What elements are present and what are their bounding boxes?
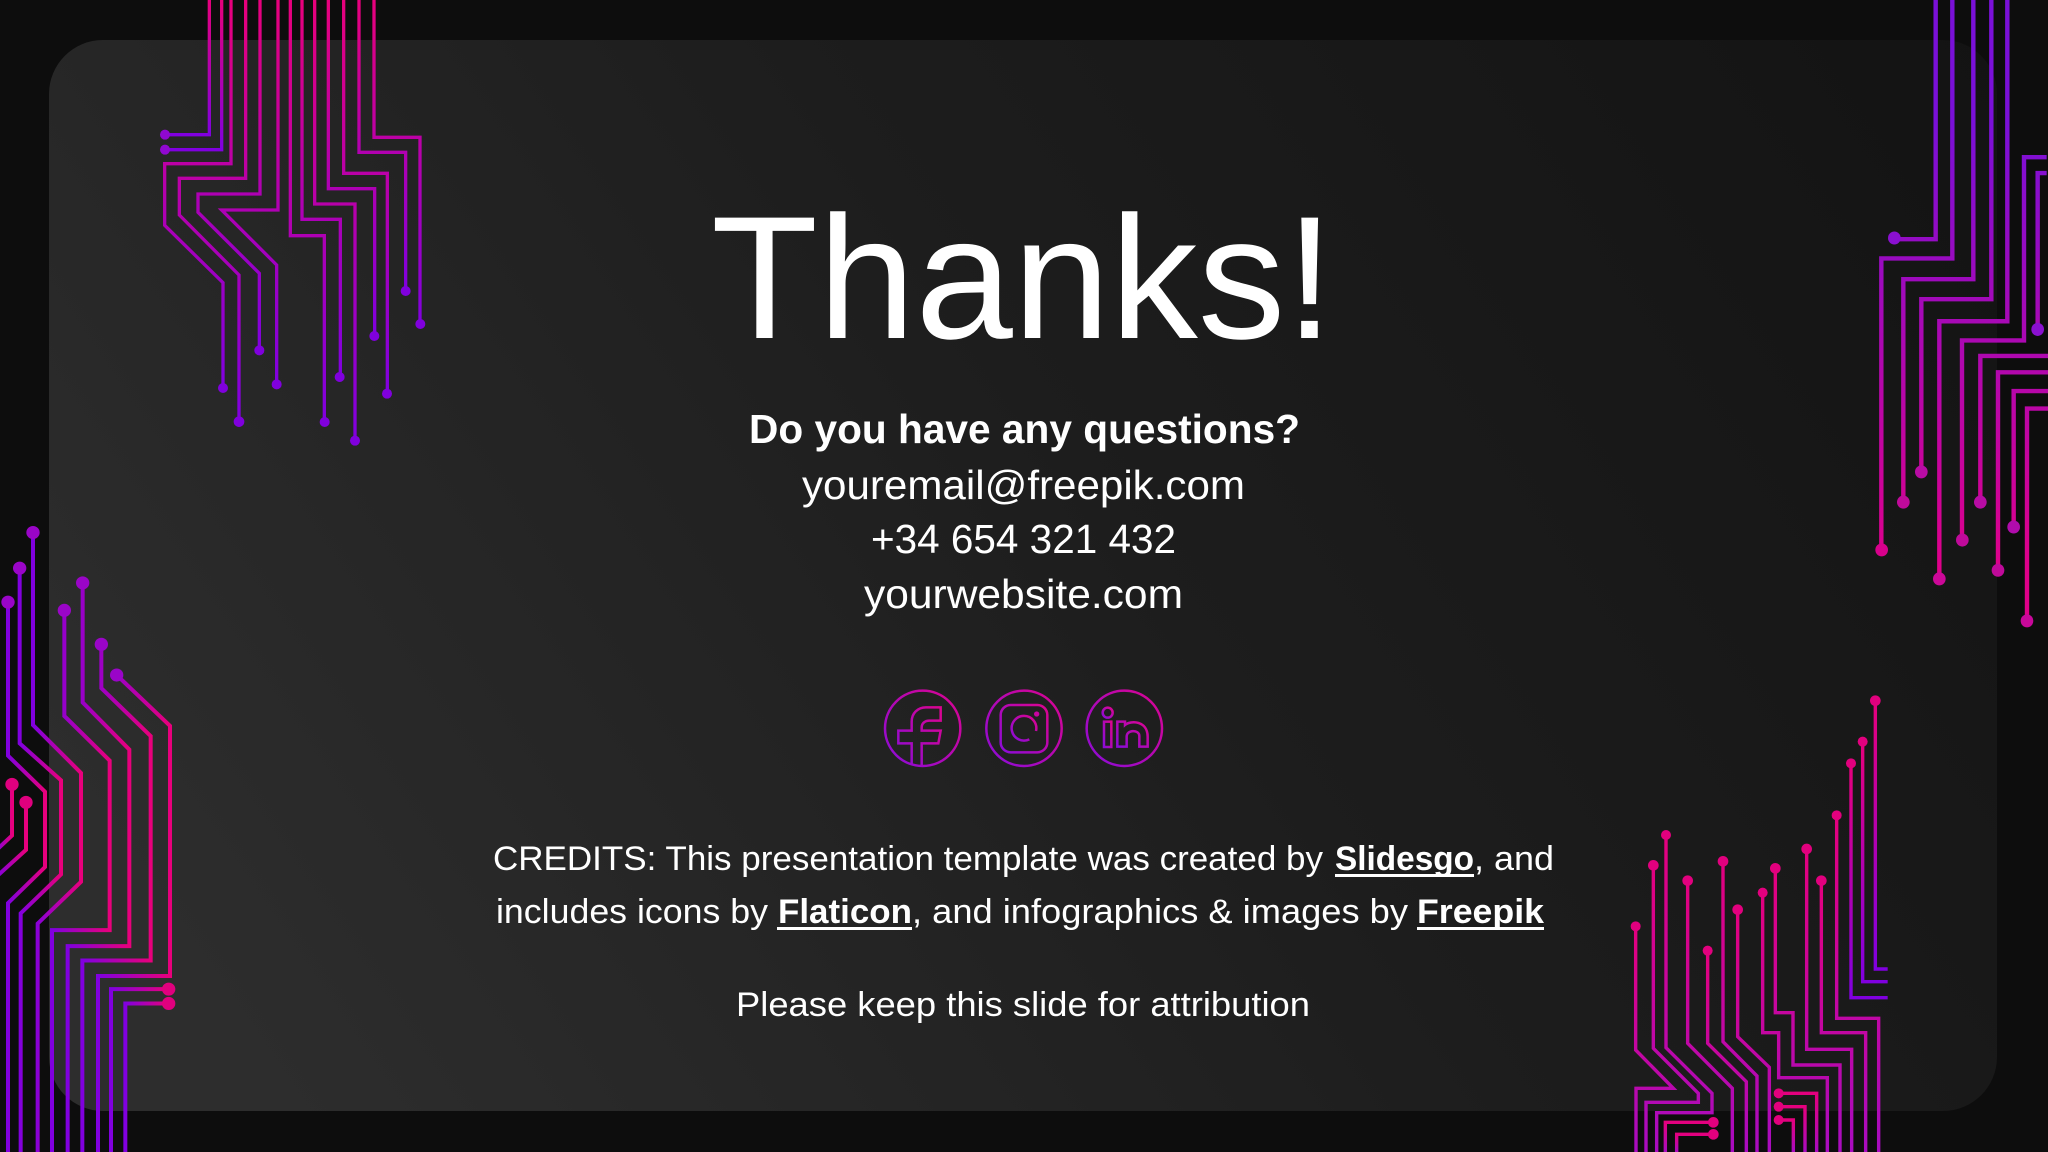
link: Flaticon: Flaticon	[778, 893, 912, 931]
email: youremail@freepik.com	[802, 462, 1245, 508]
icon: instagram	[986, 691, 1062, 766]
contact block	[749, 406, 1300, 617]
credits text: CREDITS: This presentation template was created by	[493, 840, 1323, 878]
question heading: Do you have any questions?	[749, 406, 1300, 452]
credits text	[493, 840, 1554, 931]
credits text: , and infographics & images by	[912, 893, 1408, 931]
social icons	[885, 691, 1162, 766]
icon: facebook	[885, 691, 960, 766]
circuit: top right	[1875, 0, 2048, 627]
credits text: includes icons by	[496, 893, 768, 931]
attribution note: Please keep this slide for attribution	[736, 986, 1310, 1024]
website: yourwebsite.com	[864, 571, 1183, 617]
link: Freepik: Freepik	[1417, 893, 1544, 931]
circuit: bottom left	[0, 526, 175, 1152]
link: Slidesgo: Slidesgo	[1335, 840, 1474, 878]
phone: +34 654 321 432	[871, 516, 1176, 562]
circuit: top left	[160, 0, 425, 446]
circuit: bottom right	[1631, 695, 1888, 1152]
title: Thanks!	[711, 181, 1334, 376]
credits text: , and	[1474, 840, 1554, 878]
icon: linkedin	[1087, 691, 1162, 766]
